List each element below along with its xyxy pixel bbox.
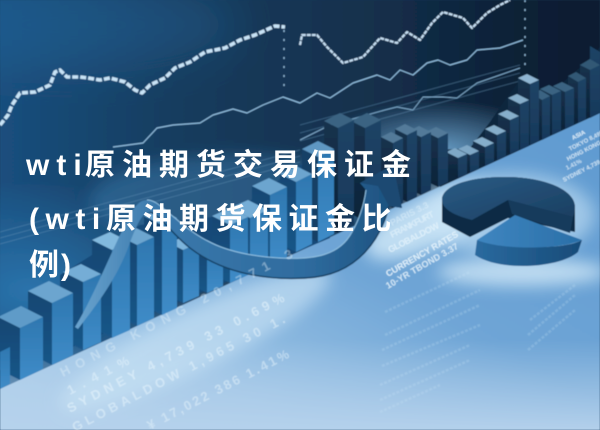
floor market data text (57, 130, 600, 430)
floor market data text: FRANKFURT (388, 209, 436, 240)
pie slice top (477, 215, 582, 248)
screen grid stripes (0, 65, 520, 244)
floor market data text: 1.41% (565, 158, 584, 172)
bar chart: dark bars on the right (324, 46, 600, 233)
floor: light blue reflective surface (0, 113, 600, 430)
lower thin line chart (300, 68, 520, 140)
staircase silhouette (440, 47, 600, 187)
floor market data text: 1.41% (64, 353, 132, 398)
arrow: rising curved ribbon (75, 165, 402, 329)
dotted vertical scale (284, 0, 525, 90)
floor market data text: CURRENCY RATES (384, 229, 460, 279)
title: three-line white heading: 例) (29, 249, 73, 282)
title: three-line white heading (25, 149, 418, 282)
line charts on the screen (0, 0, 525, 244)
pie top (442, 177, 575, 220)
pie body (442, 177, 575, 237)
title: three-line white heading: 原油期货保证金比 (106, 203, 398, 236)
blue backing behind bars (60, 165, 330, 352)
floor market data text: GLOBALDOW (386, 220, 441, 255)
floor market data text: SYDNEY 4,739 33 0.69% (64, 290, 287, 416)
pie cutout wall (508, 200, 573, 233)
market rows centre: PARIS 3.3 (388, 200, 430, 228)
title: three-line white heading: (wti (29, 203, 107, 236)
bar chart: bright blue bars on the left (0, 141, 334, 389)
candlestick trend line right (300, 0, 510, 63)
floor market data text: 10-YR TBOND 3.37 (384, 241, 460, 291)
title: three-line white heading: 原油期货交易保证金 (85, 149, 418, 182)
market rows right: ASIA (571, 130, 587, 142)
market rows lower left: HONG KONG 20,771 3 (57, 246, 295, 380)
thin line chart (113, 40, 523, 147)
pie slice side (475, 240, 582, 266)
candlestick trend line left (0, 26, 285, 125)
pie chart (442, 177, 582, 266)
faint dashed data streaks (380, 272, 575, 412)
title: three-line white heading: wti (26, 149, 89, 182)
